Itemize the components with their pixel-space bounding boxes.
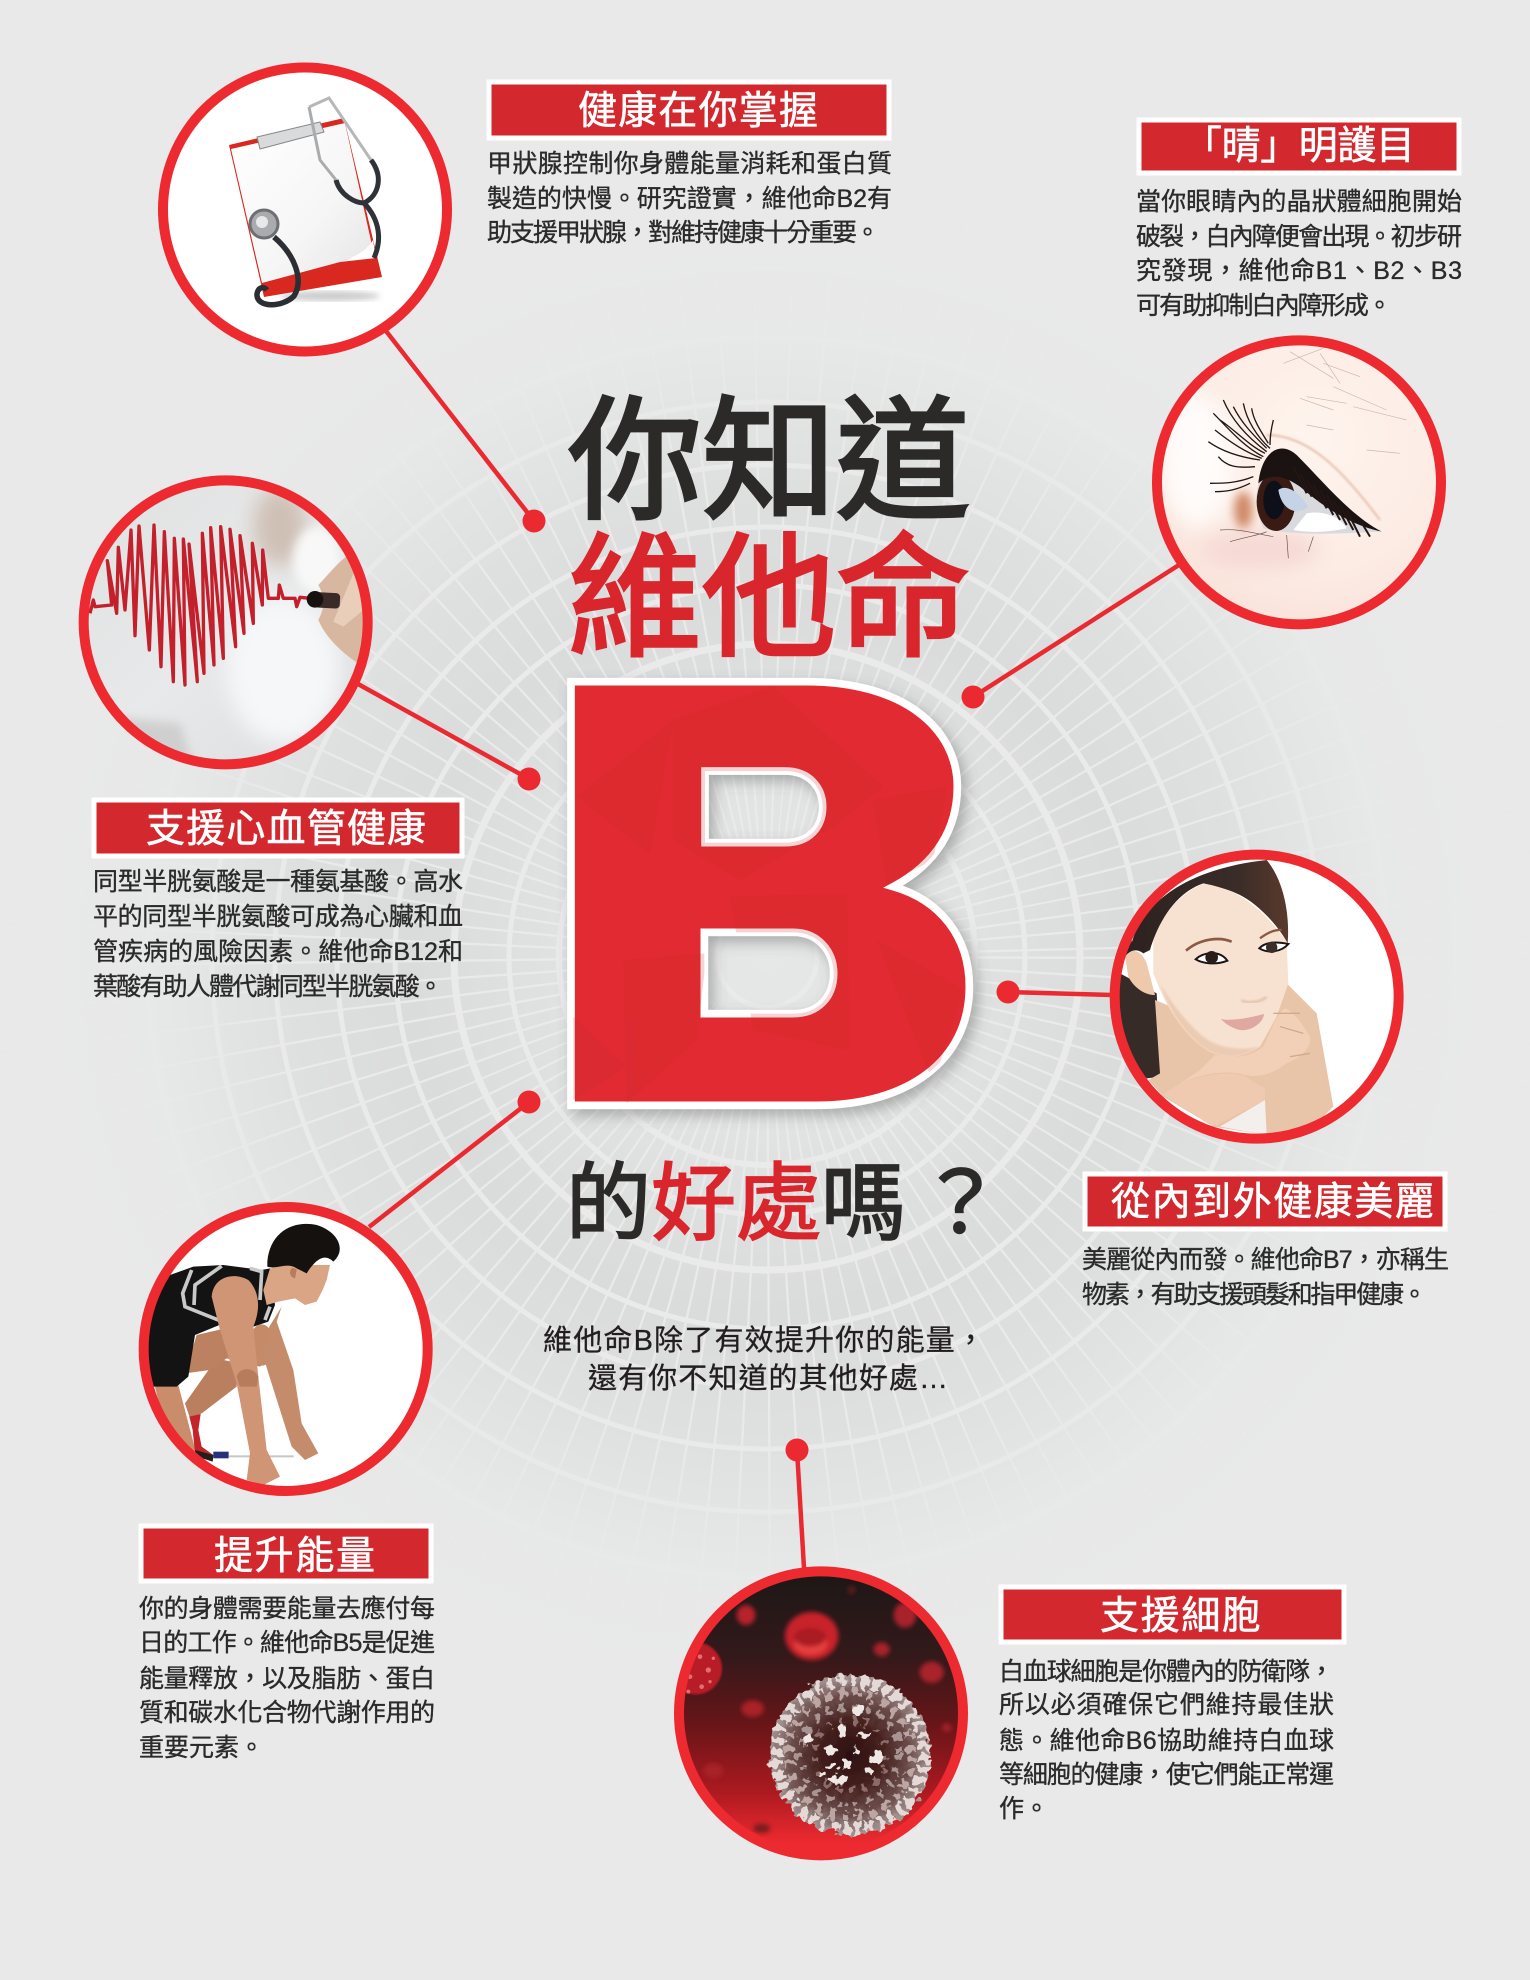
intro sentence: 還有你不知道的其他好處…	[588, 1362, 948, 1395]
panel: cell support: 作。	[999, 1795, 1049, 1823]
panel: beauty from within	[1082, 1174, 1449, 1309]
panel: thyroid health: 製造的快慢。研究證實，維他命B2有	[487, 185, 892, 213]
intro sentence	[543, 1324, 985, 1395]
panel: cardiovascular health: 支援心血管健康	[146, 808, 426, 851]
connector: eye to centre	[962, 563, 1182, 708]
panel: eye health	[1136, 120, 1462, 320]
connector: woman to centre	[996, 980, 1112, 1004]
title: line one: 你知道	[568, 388, 970, 537]
panel: eye health: 「晴」明護目	[1183, 125, 1415, 168]
photo circle: eye	[1153, 337, 1447, 630]
panel: energy boost: 質和碳水化合物代謝作用的	[139, 1699, 435, 1727]
photo circle: sprinter	[140, 1203, 433, 1497]
large letter B	[571, 682, 969, 1105]
panel: cell support: 所以必須確保它們維持最佳狀	[999, 1691, 1334, 1719]
panel: cell support: 支援細胞	[1100, 1595, 1261, 1638]
connector: heart to centre	[358, 684, 540, 790]
panel: energy boost: 日的工作。維他命B5是促進	[139, 1629, 435, 1657]
subtitle: the benefits question: 的好處嗎	[566, 1157, 906, 1252]
background: radial web pattern	[247, 437, 1276, 1478]
intro sentence: 維他命B除了有效提升你的能量，	[543, 1324, 985, 1357]
panel: thyroid health	[487, 82, 892, 247]
panel: cardiovascular health: 管疾病的風險因素。維他命B12和	[93, 938, 463, 966]
panel: energy boost: 提升能量	[214, 1535, 375, 1578]
panel: cardiovascular health: 同型半胱氨酸是一種氨基酸。高水	[93, 868, 463, 896]
photo circle: clipboard and stethoscope	[163, 68, 447, 352]
panel: energy boost: 重要元素。	[139, 1734, 264, 1762]
panel: thyroid health: 助支援甲狀腺，對維持健康十分重要。	[487, 219, 880, 247]
panel: eye health: 可有助抑制白內障形成。	[1136, 292, 1392, 320]
panel: cardiovascular health	[93, 800, 463, 1001]
connector: cell to centre	[786, 1438, 808, 1568]
panel: eye health: 破裂，白內障便會出現。初步研	[1136, 223, 1462, 251]
panel: cell support: 白血球細胞是你體內的防衛隊，	[999, 1658, 1334, 1686]
panel: cell support: 等細胞的健康，使它們能正常運	[999, 1761, 1334, 1789]
panel: energy boost: 能量釋放，以及脂肪、蛋白	[139, 1665, 435, 1693]
panel: thyroid health: 健康在你掌握	[578, 90, 818, 133]
panel: energy boost: 你的身體需要能量去應付每	[139, 1595, 435, 1623]
title: line two: 維他命	[568, 525, 970, 674]
subtitle: the benefits question: ？	[918, 1157, 1003, 1252]
panel: eye health: 究發現，維他命B1、B2、B3	[1136, 257, 1462, 285]
connector: clipboard to centre	[386, 331, 546, 532]
connector: runner to centre	[369, 1090, 540, 1227]
panel: eye health: 當你眼睛內的晶狀體細胞開始	[1136, 188, 1462, 216]
panel: energy boost	[139, 1526, 435, 1762]
panel: cardiovascular health: 平的同型半胱氨酸可成為心臟和血	[93, 903, 463, 931]
photo circle: blood cells	[670, 1567, 970, 1863]
panel: cell support	[999, 1587, 1344, 1823]
panel: cell support: 態。維他命B6協助維持白血球	[999, 1727, 1334, 1755]
panel: beauty from within: 物素，有助支援頭髮和指甲健康。	[1082, 1281, 1427, 1309]
panel: cardiovascular health: 葉酸有助人體代謝同型半胱氨酸。	[93, 973, 443, 1001]
panel: thyroid health: 甲狀腺控制你身體能量消耗和蛋白質	[487, 150, 892, 178]
photo circle: woman	[1110, 850, 1403, 1143]
panel: beauty from within: 從內到外健康美麗	[1111, 1181, 1434, 1224]
photo circle: heartbeat line	[80, 477, 373, 770]
panel: beauty from within: 美麗從內而發。維他命B7，亦稱生	[1082, 1246, 1449, 1274]
